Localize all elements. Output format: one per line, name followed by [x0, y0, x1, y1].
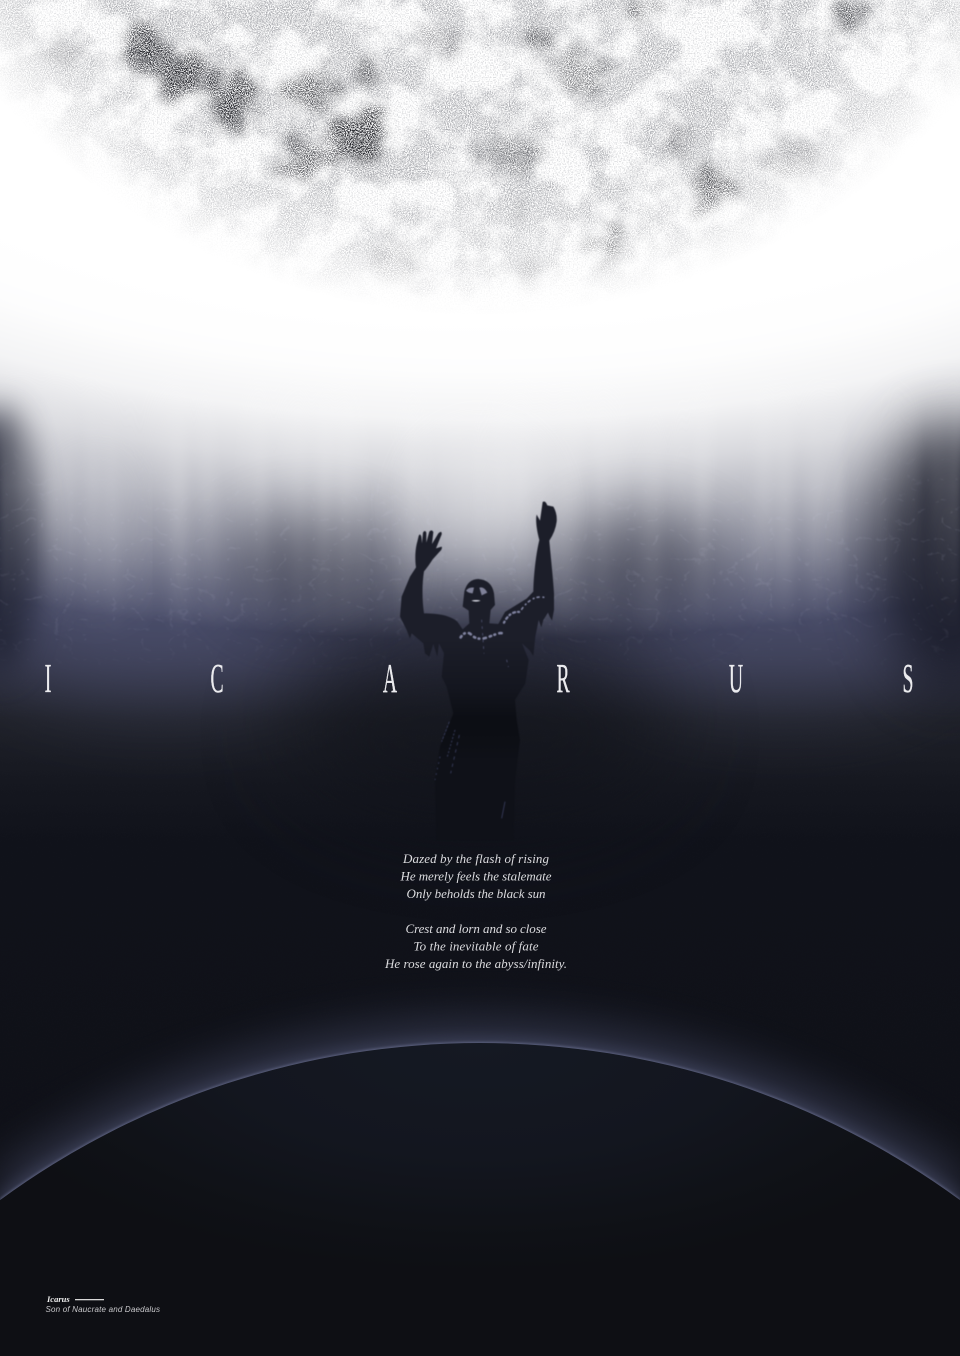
silhouette [400, 501, 557, 840]
bright rim [0, 1042, 960, 1356]
poem line 3: Only beholds the black sun [406, 886, 546, 901]
poem line 2: He merely feels the stalemate [400, 868, 552, 884]
poem line 1: Dazed by the flash of rising [402, 851, 550, 866]
letter S: S [903, 655, 913, 701]
credit name: Icarus [46, 1294, 70, 1304]
background atmosphere [0, 0, 960, 796]
near rim glow [0, 1038, 960, 1356]
title: ICARUS [45, 655, 913, 702]
figure: Icarus reaching upward [400, 501, 557, 840]
planet horizon [0, 1019, 960, 1356]
right edge shadow [880, 420, 960, 690]
poem line 4: Crest and lorn and so close [406, 921, 547, 936]
credit subtitle: Son of Naucrate and Daedalus [46, 1305, 160, 1314]
face highlights [466, 587, 487, 602]
letter I: I [45, 657, 51, 702]
letter A: A [383, 655, 397, 701]
sun surface [0, 0, 960, 300]
poem [384, 851, 567, 971]
credit block [46, 1294, 160, 1314]
outer atmospheric glow [0, 1019, 960, 1356]
poem line 6: He rose again to the abyss/infinity. [384, 956, 567, 971]
planet disc [0, 1043, 960, 1356]
letter C: C [210, 655, 224, 701]
poem line 5: To the inevitable of fate [414, 938, 539, 954]
letter R: R [556, 655, 570, 701]
lower body drips [435, 722, 505, 818]
left edge shadow [0, 405, 34, 675]
wet chest highlights [461, 597, 544, 667]
letter U: U [729, 655, 743, 701]
credit rule [75, 1299, 104, 1300]
